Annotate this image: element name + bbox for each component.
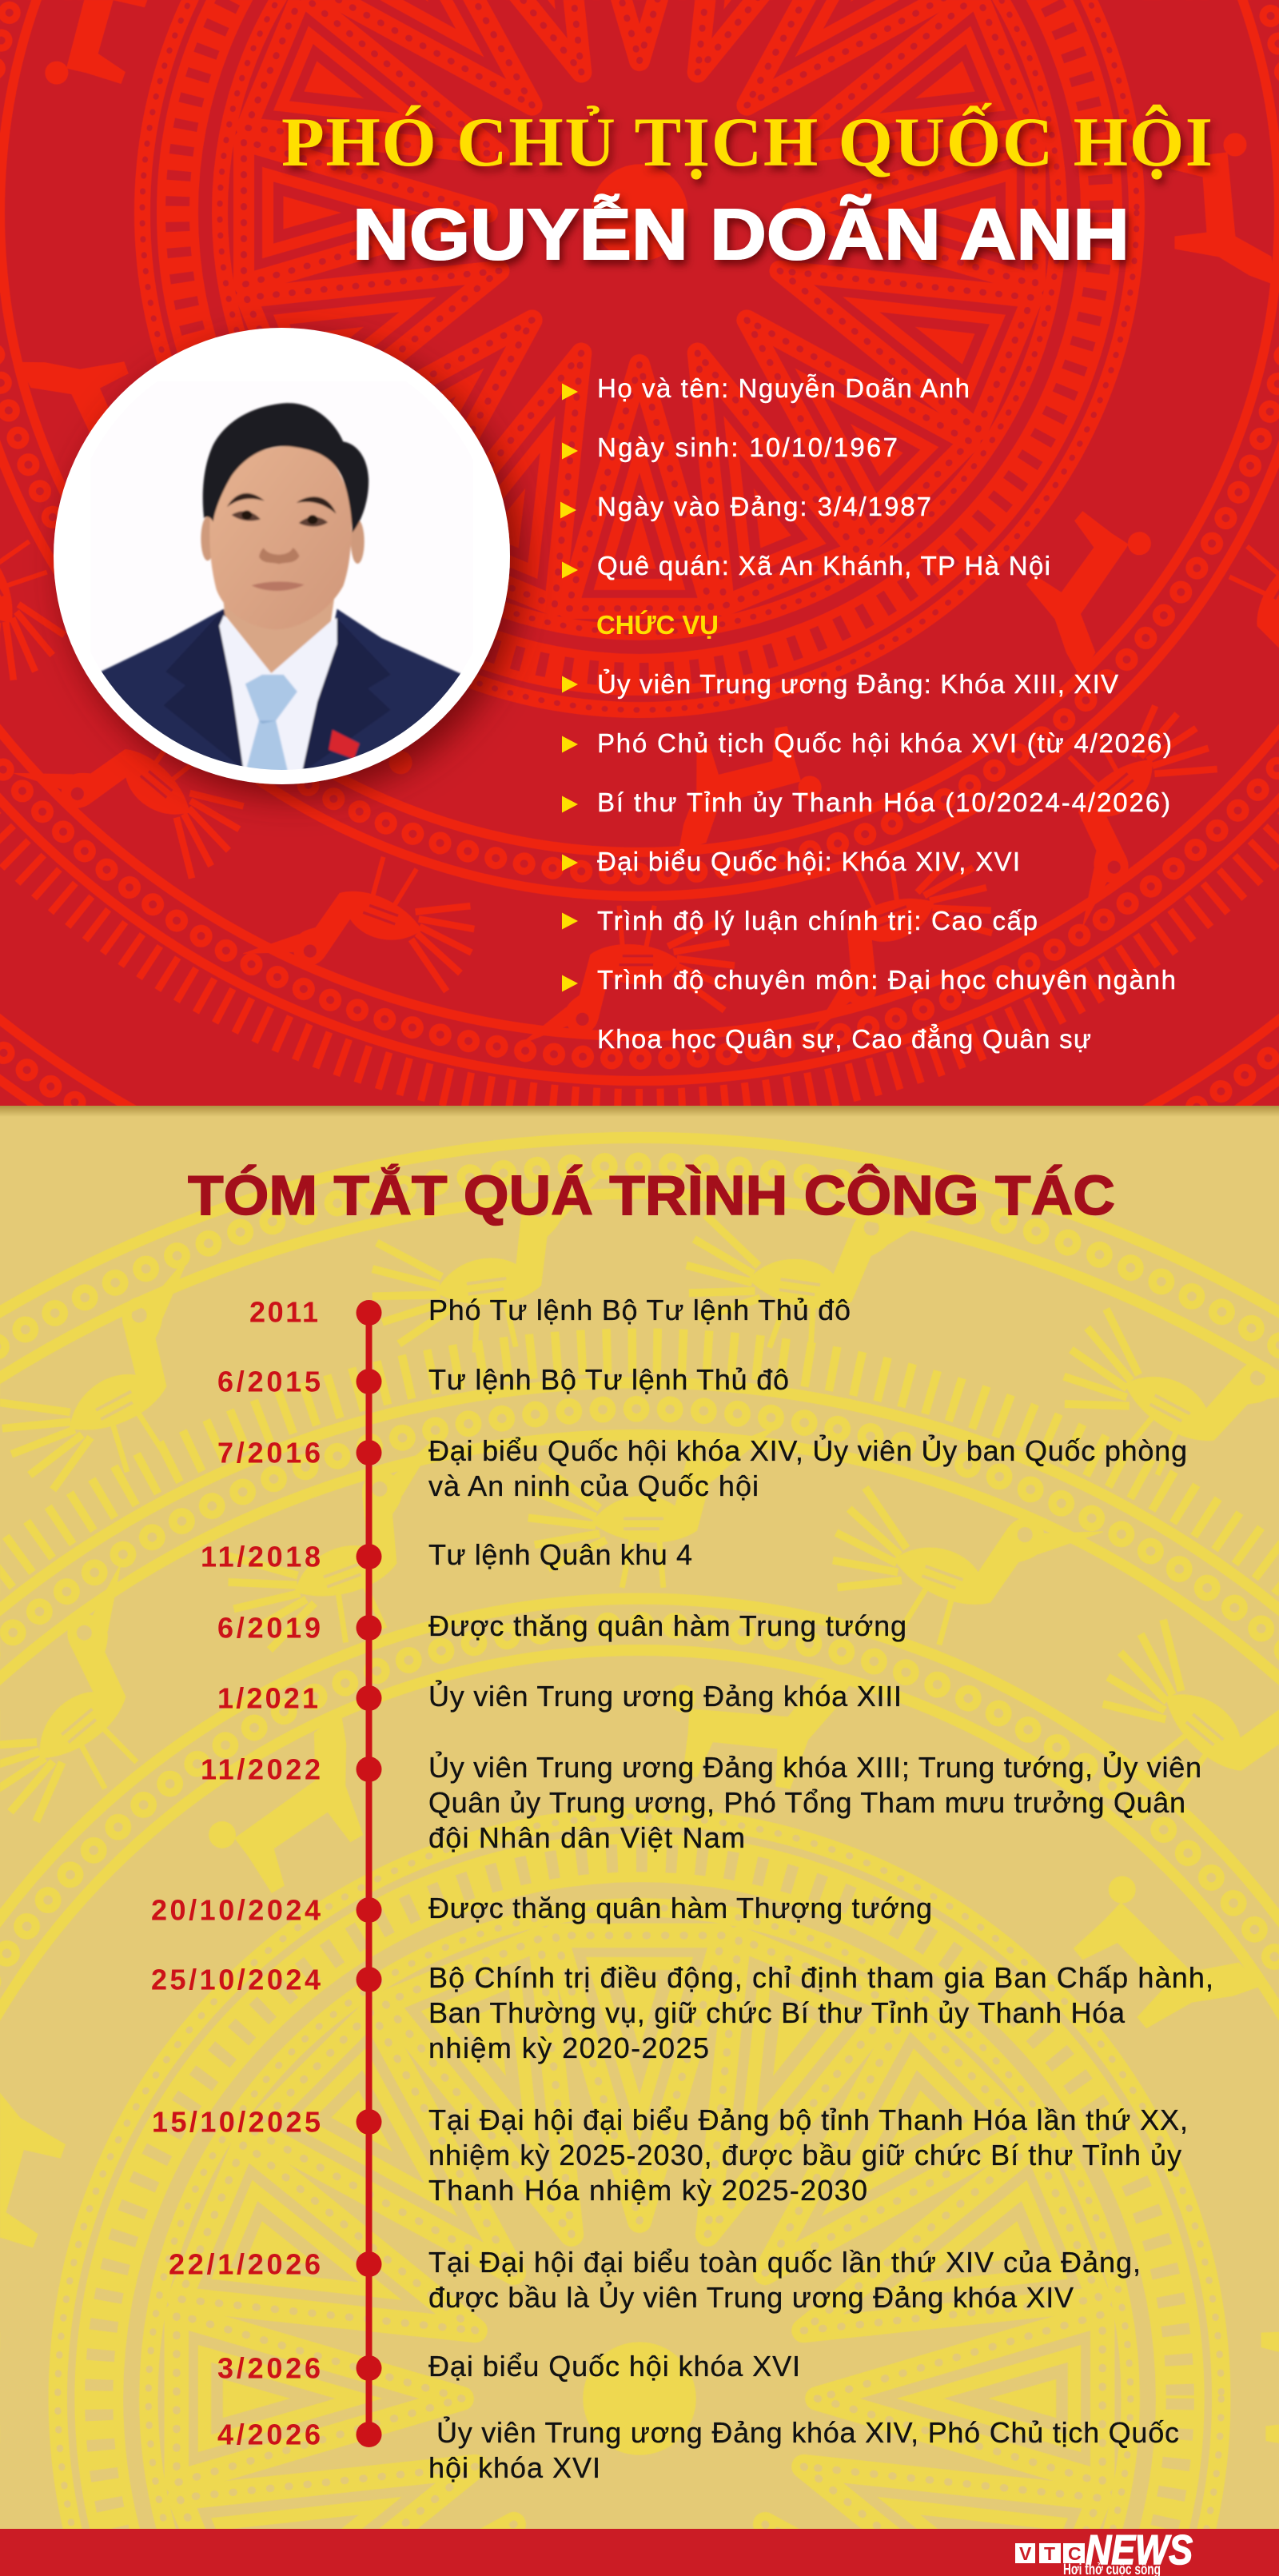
red background with drum pattern [0,0,1279,1106]
entry: 20/10/2024: 20/10/2024 [151,1893,321,1927]
profile info list: Quê quán: Xã An Khánh, TP Hà Nội [597,551,1050,580]
profile info list: Đại biểu Quốc hội: Khóa XIV, XVI [597,847,1020,876]
entry: 25/10/2024 [151,1961,1213,2064]
panel: profile (red section) [0,0,1279,1106]
entry: 15/10/2025: Thanh Hóa nhiệm kỳ 2025-2030 [428,2174,867,2207]
entry: 25/10/2024: Bộ Chính trị điều động, chỉ định tham gia Ban Chấp hành, [428,1961,1213,1994]
entry: 11/2018: Tư lệnh Quân khu 4 [428,1538,692,1571]
heading: career summary: TÓM TẮT QUÁ TRÌNH CÔNG TÁC [188,1163,1115,1226]
entry: 2011 [249,1294,851,1329]
logo: VTC News [1015,2527,1193,2576]
logo: VTC News: C [1068,2543,1082,2564]
entry: 4/2026 [217,2415,1179,2484]
entry: 25/10/2024: 25/10/2024 [151,1964,321,1996]
entry: 11/2022: 11/2022 [201,1753,321,1786]
profile info list: Ngày vào Đảng: 3/4/1987 [597,492,931,521]
profile info list [560,373,1176,1054]
entry: 22/1/2026: Tại Đại hội đại biểu toàn quốc lần thứ XIV của Đảng, [428,2246,1141,2279]
entry: 22/1/2026 [169,2246,1141,2314]
logo: VTC News: T [1044,2543,1055,2564]
entry: 15/10/2025: Tại Đại hội đại biểu Đảng bộ tỉnh Thanh Hóa lần thứ XX, [428,2103,1188,2136]
logo: VTC News: NEWS [1086,2527,1193,2574]
section top shadow [0,1106,1279,1117]
entry: 25/10/2024: Ban Thường vụ, giữ chức Bí thư Tỉnh ủy Thanh Hóa [428,1996,1126,2029]
entry: 2011: 2011 [249,1295,318,1329]
entry: 11/2022 [201,1750,1201,1854]
profile info list: Bí thư Tỉnh ủy Thanh Hóa (10/2024-4/2026) [597,788,1170,817]
entry: 11/2022: Ủy viên Trung ương Đảng khóa XIII; Trung tướng, Ủy viên [428,1750,1201,1784]
entry: 15/10/2025: nhiệm kỳ 2025-2030, được bầu giữ chức Bí thư Tỉnh ủy [428,2139,1181,2171]
entry: 7/2016: 7/2016 [217,1436,321,1469]
profile info list: Ngày sinh: 10/10/1967 [597,433,898,462]
entry: 25/10/2024: nhiệm kỳ 2020-2025 [428,2032,709,2064]
portrait photo [54,328,510,784]
entry: 1/2021: Ủy viên Trung ương Đảng khóa XIII [428,1679,902,1713]
profile info list: Phó Chủ tịch Quốc hội khóa XVI (từ 4/2026) [597,728,1172,758]
entry: 6/2019 [217,1609,906,1644]
entry: 7/2016: và An ninh của Quốc hội [428,1469,759,1502]
entry: 4/2026: Ủy viên Trung ương Đảng khóa XIV, Phó Chủ tịch Quốc [436,2415,1179,2449]
entry: 1/2021 [217,1679,902,1714]
entry: 22/1/2026: 22/1/2026 [169,2248,321,2280]
entry: 22/1/2026: được bầu là Ủy viên Trung ương Đảng khóa XIV [428,2280,1074,2314]
entry: 6/2015: Tư lệnh Bộ Tư lệnh Thủ đô [428,1363,789,1396]
title: name: NGUYỄN DOÃN ANH [353,193,1130,275]
entry: 3/2026 [217,2350,800,2384]
entry: 2011: Phó Tư lệnh Bộ Tư lệnh Thủ đô [428,1294,851,1326]
timeline axis [366,1313,373,2434]
panel: career timeline (yellow section) [0,1106,1279,2529]
entry: 3/2026: 3/2026 [217,2352,321,2384]
entry: 11/2022: Quân ủy Trung ương, Phó Tổng Tham mưu trưởng Quân [428,1786,1185,1819]
entry: 6/2019: Được thăng quân hàm Trung tướng [428,1609,906,1642]
entry: 20/10/2024 [151,1892,932,1927]
entry: 7/2016 [217,1434,1187,1502]
entry: 15/10/2025 [152,2103,1188,2207]
entry: 20/10/2024: Được thăng quân hàm Thượng tướng [428,1892,932,1924]
entry: 7/2016: Đại biểu Quốc hội khóa XIV, Ủy viên Ủy ban Quốc phòng [428,1434,1187,1467]
entry: 4/2026: hội khóa XVI [428,2451,600,2484]
entry: 15/10/2025: 15/10/2025 [152,2106,321,2138]
entry: 3/2026: Đại biểu Quốc hội khóa XVI [428,2350,800,2383]
entry: 4/2026: 4/2026 [217,2418,321,2451]
footer bar [0,2527,1279,2576]
title: position: PHÓ CHỦ TỊCH QUỐC HỘI [281,102,1213,181]
profile info list: CHỨC VỤ [596,610,719,640]
profile info list: Trình độ lý luận chính trị: Cao cấp [597,906,1038,935]
entry: 1/2021: 1/2021 [217,1682,318,1714]
profile info list: Ủy viên Trung ương Đảng: Khóa XIII, XIV [597,669,1118,699]
profile info list: Trình độ chuyên môn: Đại học chuyên ngành [597,965,1176,995]
entry: 6/2015 [217,1363,789,1398]
entry: 6/2019: 6/2019 [217,1612,321,1644]
entry: 11/2022: đội Nhân dân Việt Nam [428,1821,745,1854]
entry: 11/2018 [201,1538,692,1573]
entry: 6/2015: 6/2015 [217,1366,321,1398]
yellow background with drum pattern [0,1106,1279,2529]
profile info list: Họ và tên: Nguyễn Doãn Anh [597,373,970,403]
bullets [560,384,578,991]
entry: 11/2018: 11/2018 [201,1540,321,1573]
logo: VTC News: V [1019,2543,1032,2564]
profile info list: Khoa học Quân sự, Cao đẳng Quân sự [597,1024,1091,1054]
